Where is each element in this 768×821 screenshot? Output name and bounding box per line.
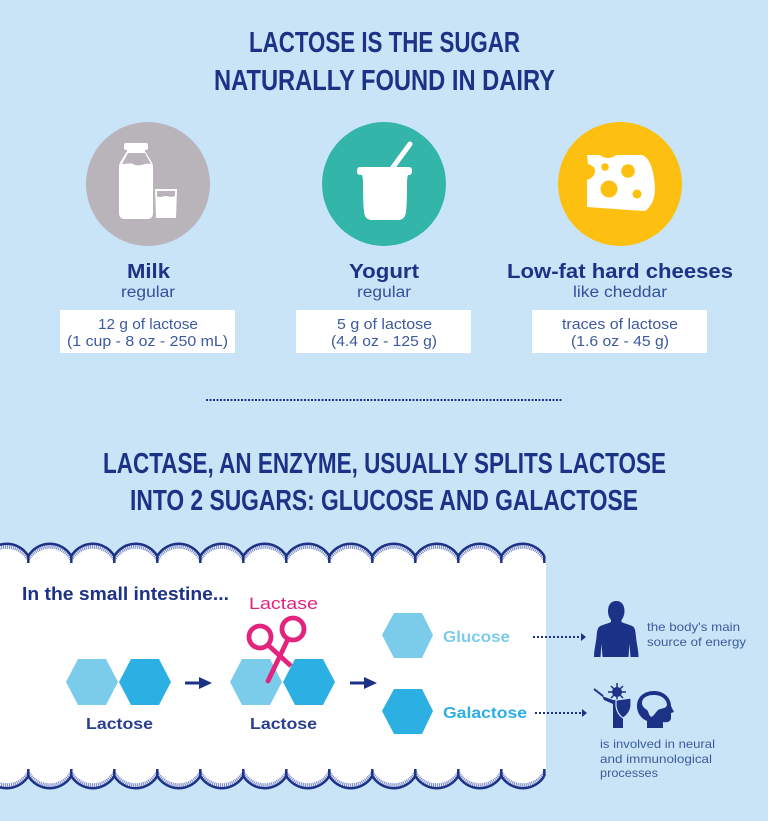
- panel: milk: [60, 122, 235, 353]
- card: yogurt lactose: (4.4 oz - 125 g): [331, 334, 437, 350]
- card: cheese lactose: (1.6 oz - 45 g): [571, 334, 669, 350]
- title: [214, 27, 555, 97]
- icon: scissors: [249, 618, 304, 681]
- diagram: glucose: Glucose: [443, 629, 510, 646]
- diagram: glucose: [382, 613, 510, 658]
- icon: head with brain: [637, 691, 674, 728]
- text: yogurt type: regular: [357, 284, 411, 301]
- diagram: lactose split by lactase: [230, 595, 335, 733]
- icon: milk bottle and glass: [86, 122, 210, 246]
- card: yogurt lactose: 5 g of lactose: [337, 317, 432, 333]
- title: LACTOSE IS THE SUGAR: [249, 27, 520, 59]
- arrow: galactose to processes: [535, 709, 587, 717]
- card: milk lactose: (1 cup - 8 oz - 250 mL): [67, 334, 228, 350]
- card: milk lactose: [60, 310, 235, 353]
- text: energy: [647, 620, 746, 649]
- card: cheese lactose: [532, 310, 707, 353]
- panel: cheese: [507, 122, 733, 353]
- diagram: lactose molecule: Lactose: [86, 716, 153, 733]
- diagram: lactose molecule: [66, 659, 171, 733]
- diagram: lactose split by lactase: Lactose: [250, 716, 317, 733]
- text: neural and immunological: is involved in neural: [600, 737, 715, 751]
- card: cheese lactose: traces of lactose: [562, 317, 678, 333]
- arrow: [350, 677, 377, 689]
- intestine shape: [0, 543, 546, 788]
- heading: in the small intestine: In the small intestine...: [22, 584, 229, 604]
- heading: lactase: INTO 2 SUGARS: GLUCOSE AND GALACTOSE: [130, 485, 638, 517]
- title: NATURALLY FOUND IN DAIRY: [214, 65, 555, 97]
- text: milk type: regular: [121, 284, 175, 301]
- diagram: galactose: [382, 689, 527, 734]
- text: neural and immunological: and immunological: [600, 752, 712, 766]
- arrow: [185, 677, 212, 689]
- card: yogurt lactose: [296, 310, 471, 353]
- icon: human torso: [594, 601, 638, 657]
- card: milk lactose: 12 g of lactose: [98, 317, 198, 333]
- icon: yogurt cup and spoon: [322, 122, 446, 246]
- text: energy: the body's main: [647, 620, 740, 634]
- heading: yogurt: Yogurt: [349, 261, 419, 283]
- panel: small intestine: [0, 543, 546, 788]
- panel: yogurt: [296, 122, 471, 353]
- heading: milk: Milk: [127, 261, 171, 283]
- icon: cheese: [558, 122, 682, 246]
- diagram: galactose: Galactose: [443, 705, 527, 722]
- text: energy: source of energy: [647, 635, 746, 649]
- arrow: glucose to energy: [533, 633, 586, 641]
- heading: lactase: [103, 448, 666, 517]
- icon: immune figure: [594, 683, 631, 728]
- heading: cheese: Low-fat hard cheeses: [507, 261, 733, 283]
- text: cheese type: like cheddar: [573, 284, 667, 301]
- label: lactase: Lactase: [249, 595, 318, 613]
- text: neural and immunological: processes: [600, 766, 658, 780]
- text: neural and immunological: [600, 737, 715, 780]
